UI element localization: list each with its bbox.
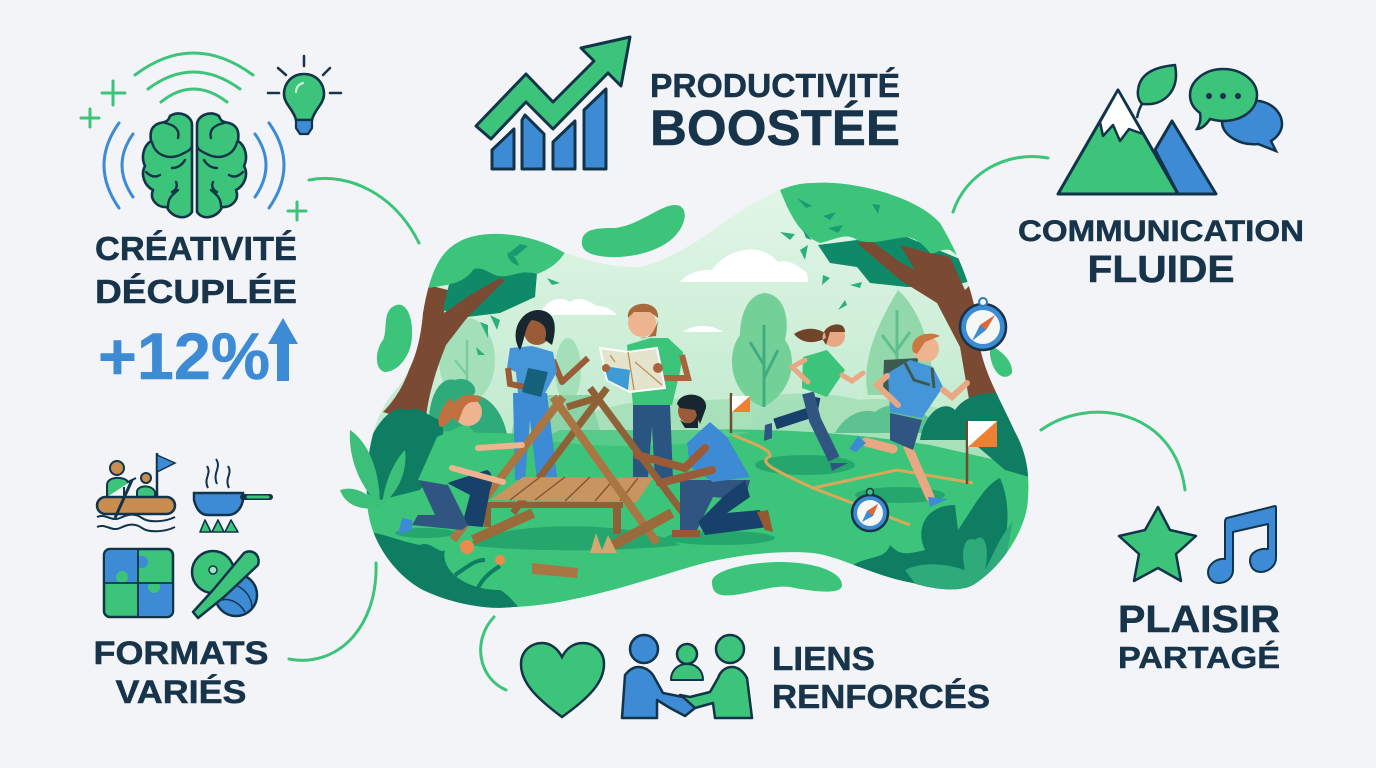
heading: DÉCUPLÉE	[95, 273, 297, 310]
tree left	[383, 285, 468, 414]
icon: sports balls and bat	[192, 551, 259, 618]
connector: communication	[953, 157, 1048, 212]
heading: FLUIDE	[1088, 249, 1234, 291]
icon: speech bubbles	[1190, 69, 1282, 151]
heading	[772, 640, 990, 715]
connector: pleasure	[1041, 412, 1185, 490]
icon: raft	[97, 453, 175, 531]
heading	[1118, 599, 1280, 675]
heading	[95, 230, 297, 310]
heading: LIENS	[772, 640, 875, 677]
icon: signal waves and plus signs	[81, 53, 306, 220]
foreground foliage left	[374, 532, 518, 608]
icon: brain	[143, 114, 246, 217]
heading: FORMATS	[94, 635, 268, 671]
icon: star	[1119, 507, 1196, 581]
heading: PARTAGÉ	[1118, 640, 1280, 675]
icon: cooking pan	[194, 459, 270, 532]
dark bush right	[920, 392, 1028, 477]
icon: people shaking hands	[622, 635, 752, 718]
heading	[1018, 215, 1304, 291]
icon: music note	[1208, 506, 1276, 583]
heading: PRODUCTIVITÉ	[650, 67, 900, 104]
panel: créativité décuplée	[81, 53, 341, 393]
person: woman kneeling	[398, 395, 522, 535]
heading	[94, 635, 268, 710]
icon: compass top	[960, 298, 1012, 377]
infographic canvas	[80, 36, 1302, 720]
icon: compass ground	[852, 488, 888, 531]
connector: bonds	[481, 617, 506, 690]
heading: RENFORCÉS	[772, 678, 990, 715]
wooden A-frame and table	[453, 388, 683, 578]
foreground foliage right	[853, 478, 1008, 590]
tree right	[818, 237, 975, 287]
person: man running with backpack	[849, 334, 967, 507]
orienteering path	[733, 435, 973, 525]
decorative blobs	[582, 205, 685, 257]
heading: VARIÉS	[116, 674, 246, 710]
person: man with map	[600, 304, 688, 480]
panel: liens renforcés	[521, 635, 990, 718]
statistic: +12%: +12%	[98, 319, 270, 393]
connector: formats	[289, 563, 376, 660]
person: woman with tablet	[507, 310, 588, 480]
heading	[650, 67, 900, 156]
icon: flags	[731, 393, 997, 484]
panel: formats variés	[94, 453, 270, 710]
connector: creativity	[309, 178, 419, 243]
panel: communication fluide	[1018, 65, 1304, 291]
person: woman running	[764, 324, 863, 471]
icon: heart	[521, 643, 604, 717]
plant outside blob	[340, 430, 405, 509]
panel: plaisir partagé	[1118, 506, 1280, 675]
heading: CRÉATIVITÉ	[95, 230, 297, 267]
ground	[366, 430, 1028, 608]
panel: central team-building scene	[340, 170, 1050, 620]
icon: growth chart	[476, 37, 630, 169]
icon: light bulb	[268, 56, 341, 134]
icon: mountains and leaf	[1058, 65, 1216, 194]
heading: PLAISIR	[1118, 599, 1280, 641]
panel: productivité boostée	[476, 37, 900, 169]
dark bush left	[360, 409, 443, 500]
heading: COMMUNICATION	[1018, 215, 1304, 248]
person: kneeling man in blue	[637, 395, 773, 537]
heading: BOOSTÉE	[650, 100, 900, 156]
icon: puzzle	[104, 549, 173, 617]
shadows	[467, 526, 680, 550]
